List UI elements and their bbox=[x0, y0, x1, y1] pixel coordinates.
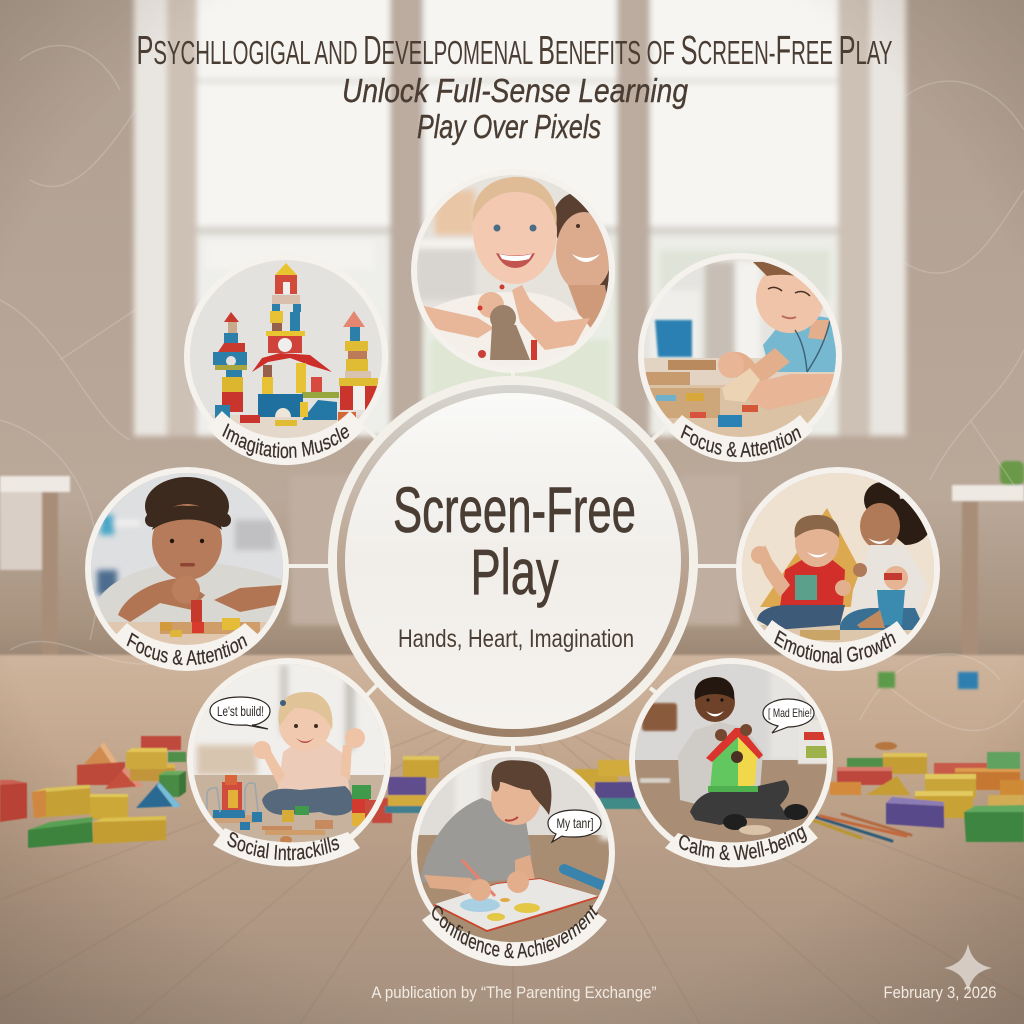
heading block bbox=[136, 27, 892, 145]
label banner: Social Intrackills: Social Intrackills bbox=[227, 832, 340, 860]
speech bubble: My tanr] bbox=[556, 815, 594, 831]
hub title: Screen-Free bbox=[393, 474, 636, 546]
central hub circle bbox=[332, 380, 694, 742]
icon: right tower bbox=[339, 311, 378, 410]
speech bubble bbox=[548, 810, 601, 842]
toy blocks left bbox=[0, 736, 186, 848]
hub title second line: Play bbox=[470, 536, 558, 608]
photo: children in play tent bbox=[735, 468, 940, 672]
label banner: Focus & Attention left: Focus & Attention bbox=[126, 632, 248, 666]
photo: boy stacking blocks bbox=[85, 468, 289, 672]
photo: boy with birdhouse bbox=[629, 658, 833, 862]
speech bubble bbox=[763, 699, 814, 733]
icon: birdhouse bbox=[706, 728, 763, 792]
icon: left tower bbox=[213, 312, 247, 412]
connector lines bbox=[286, 370, 738, 754]
photo: boy drawing in book bbox=[411, 751, 615, 955]
footer: date: February 3, 2026 bbox=[884, 983, 996, 1002]
speech bubble bbox=[210, 697, 270, 729]
hub tagline: Hands, Heart, Imagination bbox=[398, 625, 634, 653]
subtitle line 2: Play Over Pixels bbox=[417, 108, 601, 145]
icon: center tower bbox=[252, 263, 339, 420]
icon: sparkle watermark bbox=[944, 944, 992, 992]
icon: bead toy bbox=[207, 775, 258, 823]
label banner: Focus & Attention top right: Focus & Attention bbox=[680, 424, 802, 458]
label banner: Confidence & Achievement: Confidence & Achievement bbox=[432, 905, 598, 958]
photo: imagination muscle block castle bbox=[184, 260, 388, 438]
speech bubble: [ Mad Ehie! bbox=[768, 706, 812, 720]
photo: child with clay and mother bbox=[410, 170, 616, 380]
footer: publication credit: A publication by “The Parenting Exchange” bbox=[372, 984, 656, 1002]
toy blocks right bbox=[812, 672, 1024, 842]
main title: PSYCHLLOGIGAL AND DEVELPOMENAL BENEFITS OF SCREEN-FREE PLAY bbox=[136, 27, 892, 73]
photo: toddler playing with bead toy bbox=[187, 658, 391, 842]
toy blocks behind bottom photo bbox=[372, 756, 641, 823]
label banner: Emotional Growth: Emotional Growth bbox=[774, 630, 896, 664]
subtitle line 1: Unlock Full-Sense Learning bbox=[342, 72, 689, 109]
speech bubble: Le'st build! bbox=[217, 703, 264, 719]
label banner: Imagination Muscle: Imagitation Muscle bbox=[222, 423, 350, 458]
photo: boy with puzzle bbox=[638, 253, 842, 437]
label banner: Calm & Well-being: Calm & Well-being bbox=[679, 826, 807, 860]
